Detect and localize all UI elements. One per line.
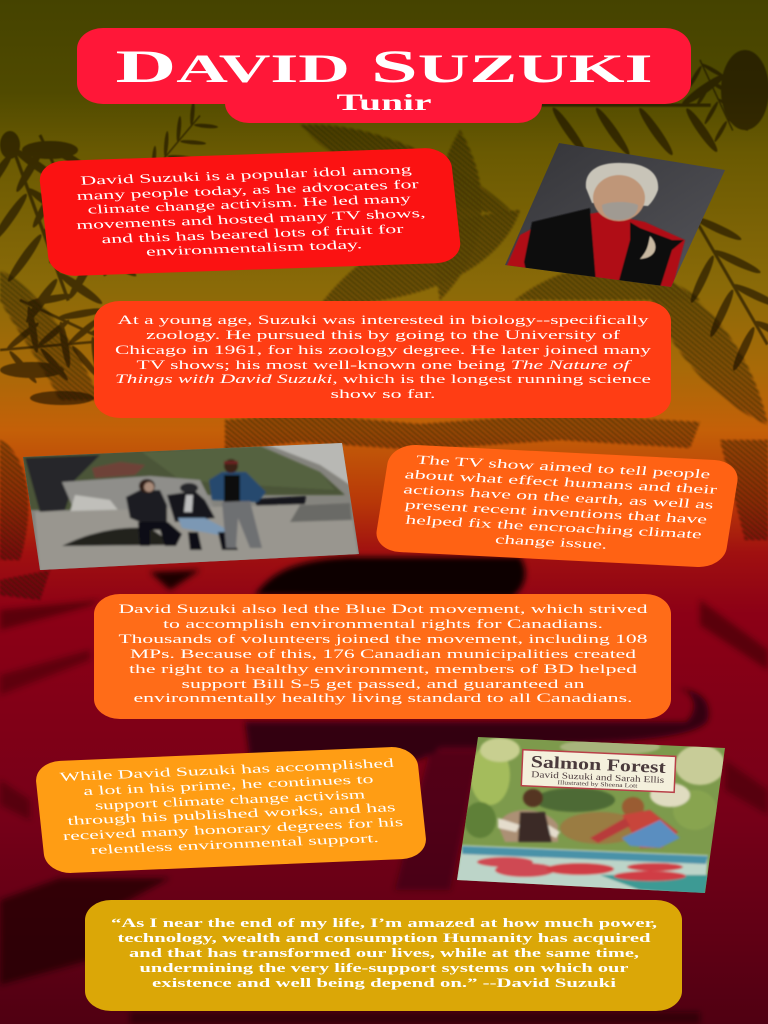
panel: early life: At a young age, Suzuki was interested in biology--specifically: [118, 313, 650, 327]
panel: quote: existence and well being depend on.” --David Suzuki: [152, 976, 617, 990]
panel: quote: technology, wealth and consumption Humanity has acquired: [118, 931, 651, 945]
title: D AVID S UZUKI: [116, 41, 652, 93]
panel: early life: Chicago in 1961, for his zoology degree. He later joined many: [115, 343, 652, 357]
panel: TV show: The TV show aimed to tell people: [415, 453, 712, 481]
panel: introduction: environmentalism today.: [145, 237, 363, 259]
panel: early life: Things with David Suzuki , which is the longest running science: [115, 372, 652, 386]
panel: later work: support climate change activism: [94, 787, 366, 813]
panel: TV show: actions have on the earth, as well as: [402, 482, 715, 512]
panel: Blue Dot movement: environmentally healthy living standard to all Canadians.: [134, 691, 632, 705]
panel: introduction: [38, 147, 462, 277]
panel: early life: show so far.: [330, 387, 436, 401]
panel: Blue Dot movement: Thousands of volunteers joined the movement, including 108: [118, 632, 648, 646]
panel: later work: relentless environmental support.: [90, 831, 379, 857]
title background: [77, 28, 691, 104]
panel: quote: undermining the very life-support systems on which our: [140, 961, 629, 975]
panel: introduction: and this has beared lots of fruit for: [101, 222, 406, 246]
panel: TV show: about what effect humans and their: [404, 467, 719, 497]
subtitle tab: [225, 80, 542, 123]
panel: TV show: [373, 444, 741, 568]
panel: introduction: movements and hosted many TV shows,: [76, 206, 426, 232]
panel: Blue Dot movement: [94, 594, 671, 719]
panel: introduction: climate change activism. He led many: [87, 191, 413, 217]
panel: Blue Dot movement: to accomplish environmental rights for Canadians.: [163, 617, 603, 631]
panel: quote: [85, 900, 682, 1011]
panel: early life: TV shows; his most well-known one being The Nature of: [136, 358, 632, 372]
book title plate: [521, 750, 676, 792]
book title plate: Salmon Forest: [530, 752, 667, 777]
panel: introduction: many people today, as he advocates for: [76, 177, 421, 203]
photo: group on the beach: [20, 440, 365, 575]
panel: quote: and that has transformed our lives, while at the same time,: [129, 946, 639, 960]
panel: later work: [34, 746, 428, 874]
panel: TV show: present recent inventions that have: [404, 498, 709, 527]
photo: David Suzuki portrait: [500, 140, 730, 290]
panel: later work: received many honorary degrees for his: [62, 815, 404, 843]
photo: Salmon Forest book cover: [450, 735, 730, 895]
panel: Blue Dot movement: support Bill S-5 get passed, and guaranteed an: [182, 677, 586, 691]
book title plate: Illustrated by Sheena Lott: [557, 780, 638, 790]
panel: TV show: change issue.: [494, 532, 608, 552]
subtitle: Tunir: [336, 90, 432, 115]
panel: Blue Dot movement: David Suzuki also led the Blue Dot movement, which strived: [118, 602, 649, 616]
book title plate: David Suzuki and Sarah Ellis: [531, 769, 665, 785]
panel: later work: While David Suzuki has accomplished: [59, 756, 396, 784]
dark foliage mass: [255, 557, 525, 597]
title banner: [77, 28, 691, 123]
panel: early life: zoology. He pursued this by going to the University of: [146, 328, 621, 342]
panel: Blue Dot movement: MPs. Because of this, 176 Canadian municipalities created: [130, 647, 637, 661]
panel: TV show: helped fix the encroaching climate: [405, 513, 703, 541]
panel: quote: “As I near the end of my life, I’m amazed at how much power,: [111, 916, 657, 930]
panel: later work: through his published works, and has: [67, 800, 396, 828]
panel: Blue Dot movement: the right to a healthy environment, members of BD helped: [129, 662, 638, 676]
panel: early life: [94, 301, 671, 418]
panel: introduction: David Suzuki is a popular idol among: [80, 162, 413, 188]
panel: later work: a lot in his prime, he continues to: [83, 772, 374, 798]
